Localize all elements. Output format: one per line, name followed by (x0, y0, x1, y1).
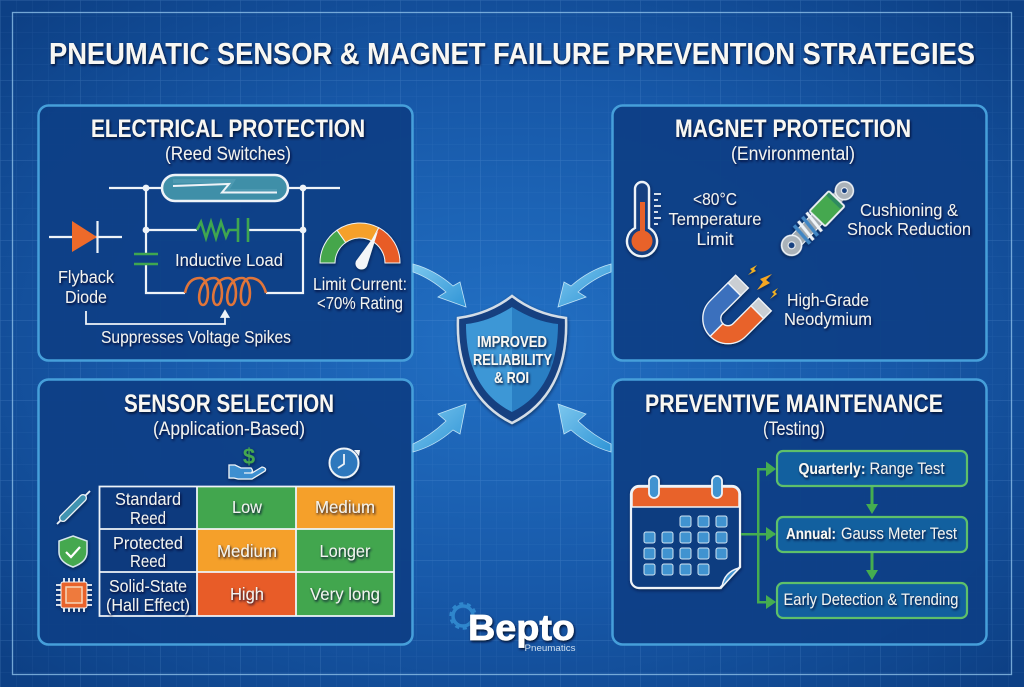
icon: protected shield (59, 536, 87, 567)
table values: High (230, 584, 264, 604)
icon: current gauge (320, 223, 400, 270)
box: early detection and trending (777, 583, 967, 618)
logo: Bepto Pneumatics (451, 604, 576, 654)
comparison table (99, 486, 394, 616)
table row labels: Protected (113, 533, 183, 553)
label: flyback diode: Diode (65, 287, 107, 307)
label: high-grade neodymium: High-Grade (787, 290, 869, 310)
arrows: calendar to tests (741, 462, 878, 609)
label: cushioning and shock reduction (847, 200, 971, 239)
heading: sensor selection: SENSOR SELECTION (124, 390, 334, 418)
icon: calendar (631, 476, 740, 588)
box: quarterly range test: Quarterly: (798, 461, 866, 478)
icon: service life clock (330, 448, 360, 478)
icon: shock absorber (776, 176, 859, 261)
heading: preventive maintenance (645, 390, 943, 440)
label: flyback diode: Flyback (58, 267, 114, 287)
arrow: suppression bracket (86, 311, 228, 324)
icon: standard reed (57, 491, 90, 524)
box: quarterly range test (777, 451, 967, 486)
heading: preventive maintenance: PREVENTIVE MAINTENANCE (645, 390, 943, 418)
icon: inductive coil (185, 278, 266, 305)
table row labels (106, 489, 190, 615)
table values: Low (232, 497, 262, 517)
heading: electrical protection: (Reed Switches) (165, 144, 291, 165)
label: inductive load: Inductive Load (175, 250, 283, 270)
icon: cost: $ (243, 444, 255, 469)
table row labels: (Hall Effect) (106, 595, 190, 615)
table row labels: Standard (115, 489, 181, 509)
icon: flyback diode (49, 221, 122, 253)
label: limit current: <70% Rating (317, 293, 403, 313)
label: high-grade neodymium (784, 290, 872, 329)
panel: preventive maintenance (612, 380, 986, 644)
heading: magnet protection (675, 115, 911, 165)
logo: Bepto Pneumatics: Bepto (468, 607, 575, 648)
shield: improved reliability and ROI (458, 296, 566, 423)
arrow: sensor selection to shield (413, 404, 466, 452)
box: quarterly range test: Range Test (870, 460, 945, 478)
icon: solid-state chip (56, 578, 92, 612)
label: cushioning and shock reduction: Cushioning & (860, 200, 958, 220)
panel: electrical protection (38, 106, 412, 360)
box: annual gauss meter test (777, 517, 967, 552)
label: limit current: Limit Current: (313, 274, 407, 294)
label: temperature limit: <80°C (693, 189, 737, 209)
table row labels: Reed (130, 508, 166, 528)
shield label: RELIABILITY (473, 352, 553, 369)
panel: magnet protection (612, 106, 986, 360)
icon: cost (229, 444, 266, 479)
table values: Longer (320, 541, 371, 561)
label: high-grade neodymium: Neodymium (784, 309, 872, 329)
arrow: magnet to shield (558, 264, 611, 307)
table values: Very long (310, 584, 380, 604)
icon: thermometer (627, 182, 661, 256)
heading: sensor selection: (Application-Based) (153, 419, 305, 440)
shield label (473, 334, 553, 387)
table values: Medium (315, 497, 375, 517)
icon: horseshoe magnet (692, 265, 778, 354)
icon: resistor and capacitor (134, 218, 248, 264)
shield label: IMPROVED (477, 334, 547, 351)
label: temperature limit: Temperature (668, 209, 762, 229)
circuit wiring (109, 185, 340, 293)
table values (217, 497, 380, 604)
arrow: maintenance to shield (558, 404, 611, 452)
heading: sensor selection (124, 390, 334, 440)
label: temperature limit (668, 189, 762, 249)
heading: preventive maintenance: (Testing) (763, 419, 825, 440)
arrow: electrical to shield (413, 264, 466, 307)
box: annual gauss meter test: Annual: (786, 526, 836, 543)
panel: sensor selection (38, 380, 412, 644)
heading: magnet protection: MAGNET PROTECTION (675, 115, 911, 143)
label: temperature limit: Limit (696, 229, 734, 249)
icon: reed switch (162, 175, 288, 201)
table values: Medium (217, 541, 277, 561)
heading: electrical protection (91, 115, 365, 165)
heading: electrical protection: ELECTRICAL PROTECTION (91, 115, 365, 143)
table row labels: Reed (130, 551, 166, 571)
label: flyback diode (58, 267, 114, 307)
shield label: & ROI (494, 370, 529, 387)
logo: Bepto Pneumatics: Pneumatics (524, 643, 576, 654)
box: early detection and trending: Early Detection & Trending (784, 591, 958, 609)
table row labels: Solid-State (109, 576, 187, 596)
label: suppresses voltage spikes: Suppresses Voltage Spikes (101, 327, 291, 347)
label: cushioning and shock reduction: Shock Reduction (847, 219, 971, 239)
label: limit current (313, 274, 407, 313)
heading: magnet protection: (Environmental) (731, 144, 855, 165)
box: annual gauss meter test: Gauss Meter Test (841, 525, 957, 543)
